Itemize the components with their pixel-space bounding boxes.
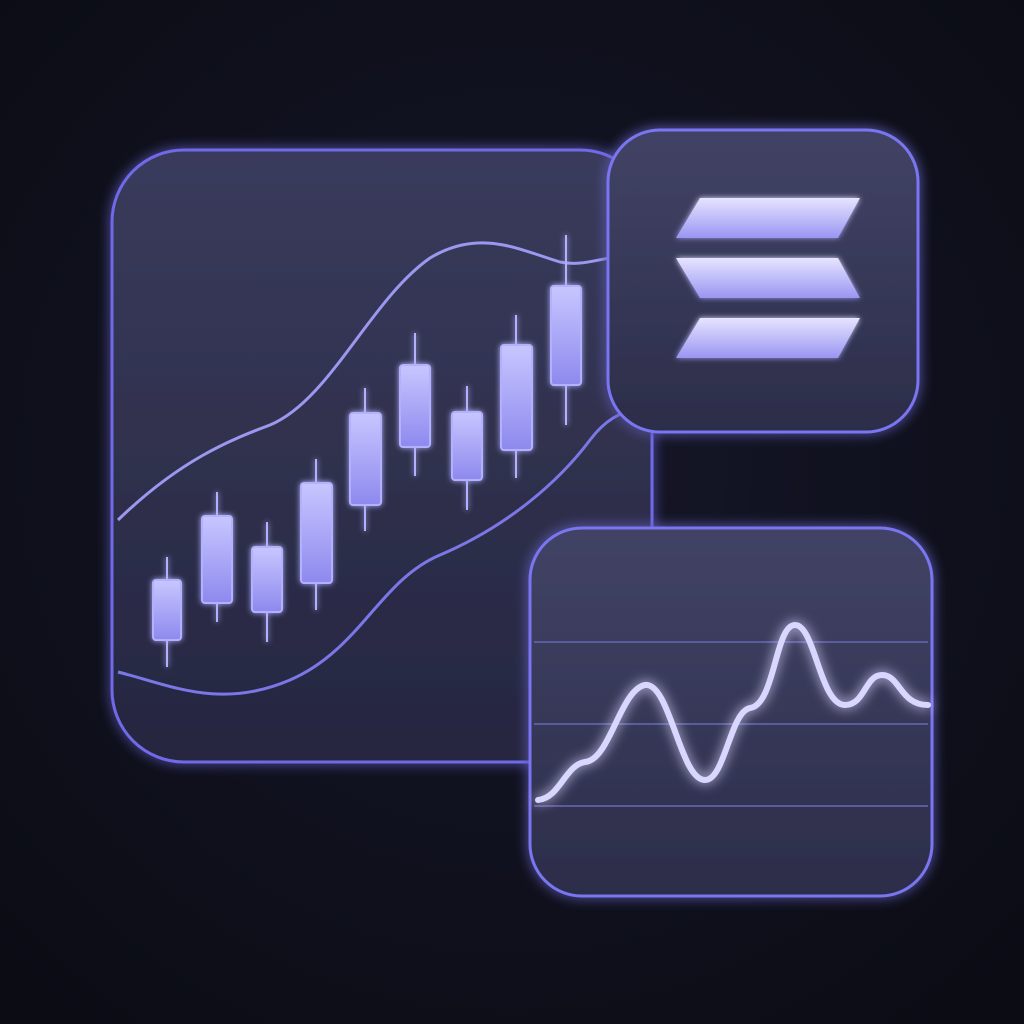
panel: candlestick chart: [112, 150, 652, 762]
upper band curve: [118, 243, 610, 520]
lower band curve: [118, 408, 640, 694]
wave line: [538, 625, 928, 800]
candlesticks: [153, 235, 581, 667]
panel: oscillator chart: [530, 528, 932, 896]
panel: token logo: [608, 130, 918, 432]
icon: stacked bars logo: [676, 198, 860, 358]
